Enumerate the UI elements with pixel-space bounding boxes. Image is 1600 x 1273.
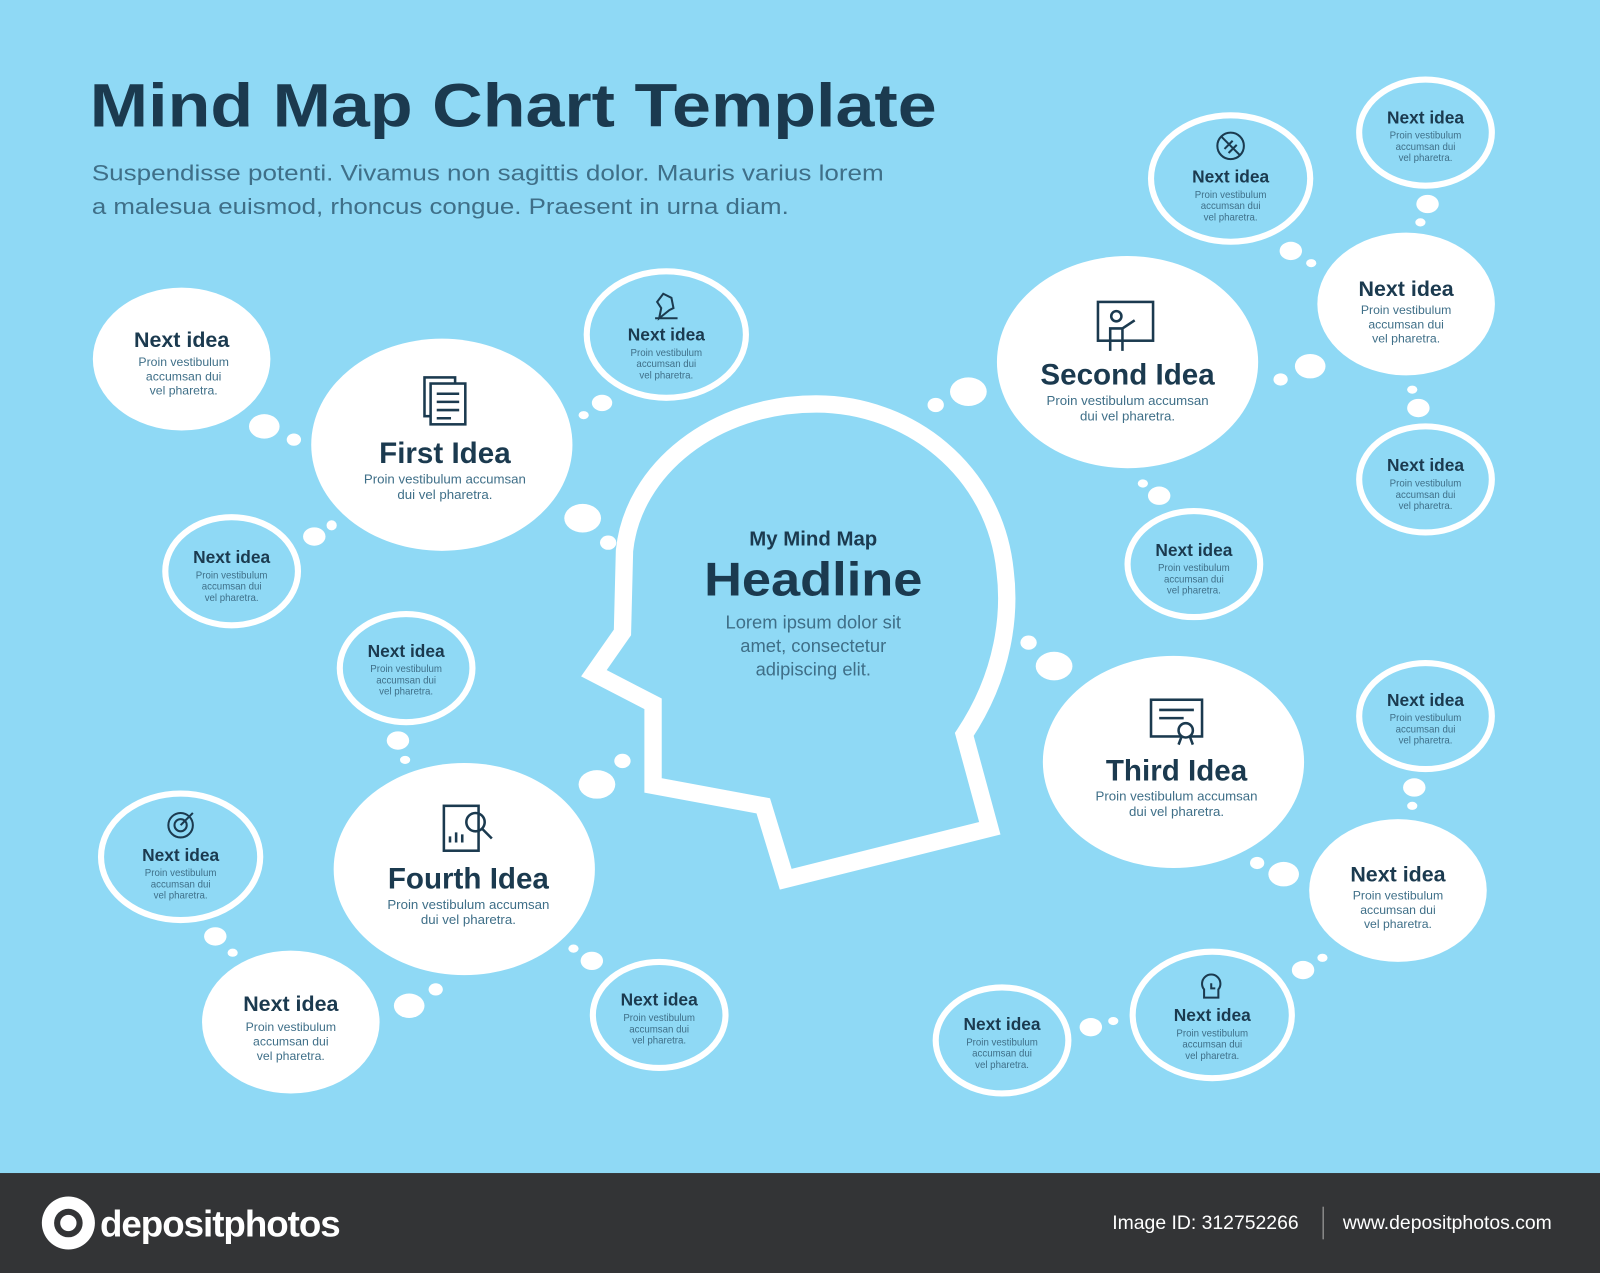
text: Proin vestibulum xyxy=(966,1038,1038,1049)
big idea: Second: Proin vestibulum accumsan xyxy=(1047,393,1209,408)
text: accumsan dui xyxy=(202,582,262,593)
big idea: Third: Proin vestibulum accumsan xyxy=(1096,789,1258,804)
text: Proin vestibulum xyxy=(1158,563,1230,574)
text: accumsan dui xyxy=(376,675,436,686)
text: accumsan dui xyxy=(629,1024,689,1035)
text: Proin vestibulum xyxy=(623,1013,695,1024)
text: Proin vestibulum xyxy=(1390,131,1461,142)
outlined next ideas xyxy=(101,80,1492,1093)
text: Next idea xyxy=(1174,1005,1251,1025)
text: Next idea xyxy=(1192,167,1270,187)
text: vel pharetra. xyxy=(639,370,693,381)
filled next ideas: Next idea xyxy=(1359,277,1455,301)
text: Next idea xyxy=(142,845,220,865)
text: accumsan dui xyxy=(1360,903,1436,917)
text: Proin vestibulum xyxy=(1390,479,1461,490)
text: Next idea xyxy=(621,990,698,1010)
text: vel pharetra. xyxy=(257,1049,325,1063)
text: Proin vestibulum xyxy=(631,348,702,359)
central headline: amet, consectetur xyxy=(740,635,886,656)
text: vel pharetra. xyxy=(1399,501,1452,512)
text: vel pharetra. xyxy=(205,593,259,604)
head outline xyxy=(594,404,1007,879)
text: accumsan dui xyxy=(253,1035,329,1049)
filled next ideas xyxy=(93,233,1495,1093)
big idea: Fourth: Fourth Idea xyxy=(388,862,549,895)
text: Next idea xyxy=(1155,540,1233,560)
big idea: Third: dui vel pharetra. xyxy=(1129,804,1224,819)
text: vel pharetra. xyxy=(632,1035,686,1046)
icons on outlined bubbles xyxy=(168,133,1244,998)
text: vel pharetra. xyxy=(1204,212,1258,223)
big idea: Third: Third Idea xyxy=(1106,754,1248,787)
text: vel pharetra. xyxy=(1364,917,1432,931)
central headline: Lorem ipsum dolor sit xyxy=(725,611,901,632)
footer info: Image ID: 312752266 xyxy=(1112,1212,1299,1234)
text: vel pharetra. xyxy=(1399,736,1452,747)
footer info xyxy=(1112,1207,1552,1239)
text: Proin vestibulum xyxy=(1176,1028,1248,1039)
filled next ideas: Next idea xyxy=(243,992,340,1016)
big idea: Fourth: Proin vestibulum accumsan xyxy=(387,897,549,912)
text: vel pharetra. xyxy=(1167,586,1221,597)
icon: presentation xyxy=(1098,302,1153,351)
text: accumsan dui xyxy=(1164,574,1224,585)
subtitle: a malesua euismod, rhoncus congue. Praesent in urna diam. xyxy=(92,194,789,219)
text: Next idea xyxy=(193,547,271,567)
central headline xyxy=(704,529,922,679)
footer logo: depositphotos xyxy=(100,1203,340,1244)
icon: report xyxy=(444,806,492,851)
text: accumsan dui xyxy=(1396,724,1455,735)
filled next ideas: Next idea xyxy=(1350,862,1447,886)
text: vel pharetra. xyxy=(975,1060,1029,1071)
big idea: Fourth xyxy=(334,763,595,975)
text: Proin vestibulum xyxy=(138,355,229,369)
big idea: First xyxy=(311,339,572,551)
text: vel pharetra. xyxy=(150,384,218,398)
text: Proin vestibulum xyxy=(1195,190,1266,201)
subtitle: Suspendisse potenti. Vivamus non sagittis dolor. Mauris varius lorem xyxy=(92,161,884,186)
big idea: First: First Idea xyxy=(379,437,511,470)
text: accumsan dui xyxy=(1396,142,1455,153)
text: Next idea xyxy=(1387,107,1464,127)
central headline: Headline xyxy=(704,554,922,606)
filled next ideas: Next idea xyxy=(134,328,230,352)
text: Proin vestibulum xyxy=(1353,889,1443,903)
subtitle xyxy=(92,161,884,219)
text: vel pharetra. xyxy=(1185,1051,1239,1062)
text: accumsan dui xyxy=(1396,490,1455,501)
text: accumsan dui xyxy=(1182,1040,1242,1051)
text: Proin vestibulum xyxy=(246,1020,336,1034)
text: vel pharetra. xyxy=(1399,153,1452,164)
big idea: First: Proin vestibulum accumsan xyxy=(364,471,526,486)
big idea: Second: dui vel pharetra. xyxy=(1080,408,1175,423)
text: accumsan dui xyxy=(151,879,211,890)
text: Proin vestibulum xyxy=(1390,713,1461,724)
text: accumsan dui xyxy=(636,359,696,370)
big idea: Fourth: dui vel pharetra. xyxy=(421,912,516,927)
text: vel pharetra. xyxy=(379,687,433,698)
footer info: www.depositphotos.com xyxy=(1342,1212,1552,1234)
text: Next idea xyxy=(964,1014,1041,1034)
big idea: First: dui vel pharetra. xyxy=(397,487,492,502)
text: Next idea xyxy=(1387,455,1464,475)
text: Proin vestibulum xyxy=(196,570,267,581)
text: Next idea xyxy=(628,325,705,345)
central headline: My Mind Map xyxy=(749,529,877,551)
text: Proin vestibulum xyxy=(145,868,216,879)
text: Next idea xyxy=(1387,690,1464,710)
text: vel pharetra. xyxy=(154,891,208,902)
title: Mind Map Chart Template xyxy=(90,71,937,139)
big idea: Third xyxy=(1043,656,1304,868)
text: Proin vestibulum xyxy=(1361,303,1451,317)
big idea: Second xyxy=(997,256,1258,468)
text: Proin vestibulum xyxy=(370,664,442,675)
text: Next idea xyxy=(368,641,445,661)
central headline: adipiscing elit. xyxy=(756,658,871,679)
text: accumsan dui xyxy=(1201,201,1261,212)
footer bar xyxy=(0,1173,1600,1273)
text: accumsan dui xyxy=(1368,317,1444,331)
footer logo xyxy=(42,1196,340,1250)
text: accumsan dui xyxy=(146,369,221,383)
text: accumsan dui xyxy=(972,1049,1032,1060)
icon: document xyxy=(424,377,465,424)
text: vel pharetra. xyxy=(1372,332,1440,346)
connector bubbles xyxy=(204,195,1439,1036)
big idea: Second: Second Idea xyxy=(1040,359,1215,392)
icon: certificate xyxy=(1151,700,1202,745)
